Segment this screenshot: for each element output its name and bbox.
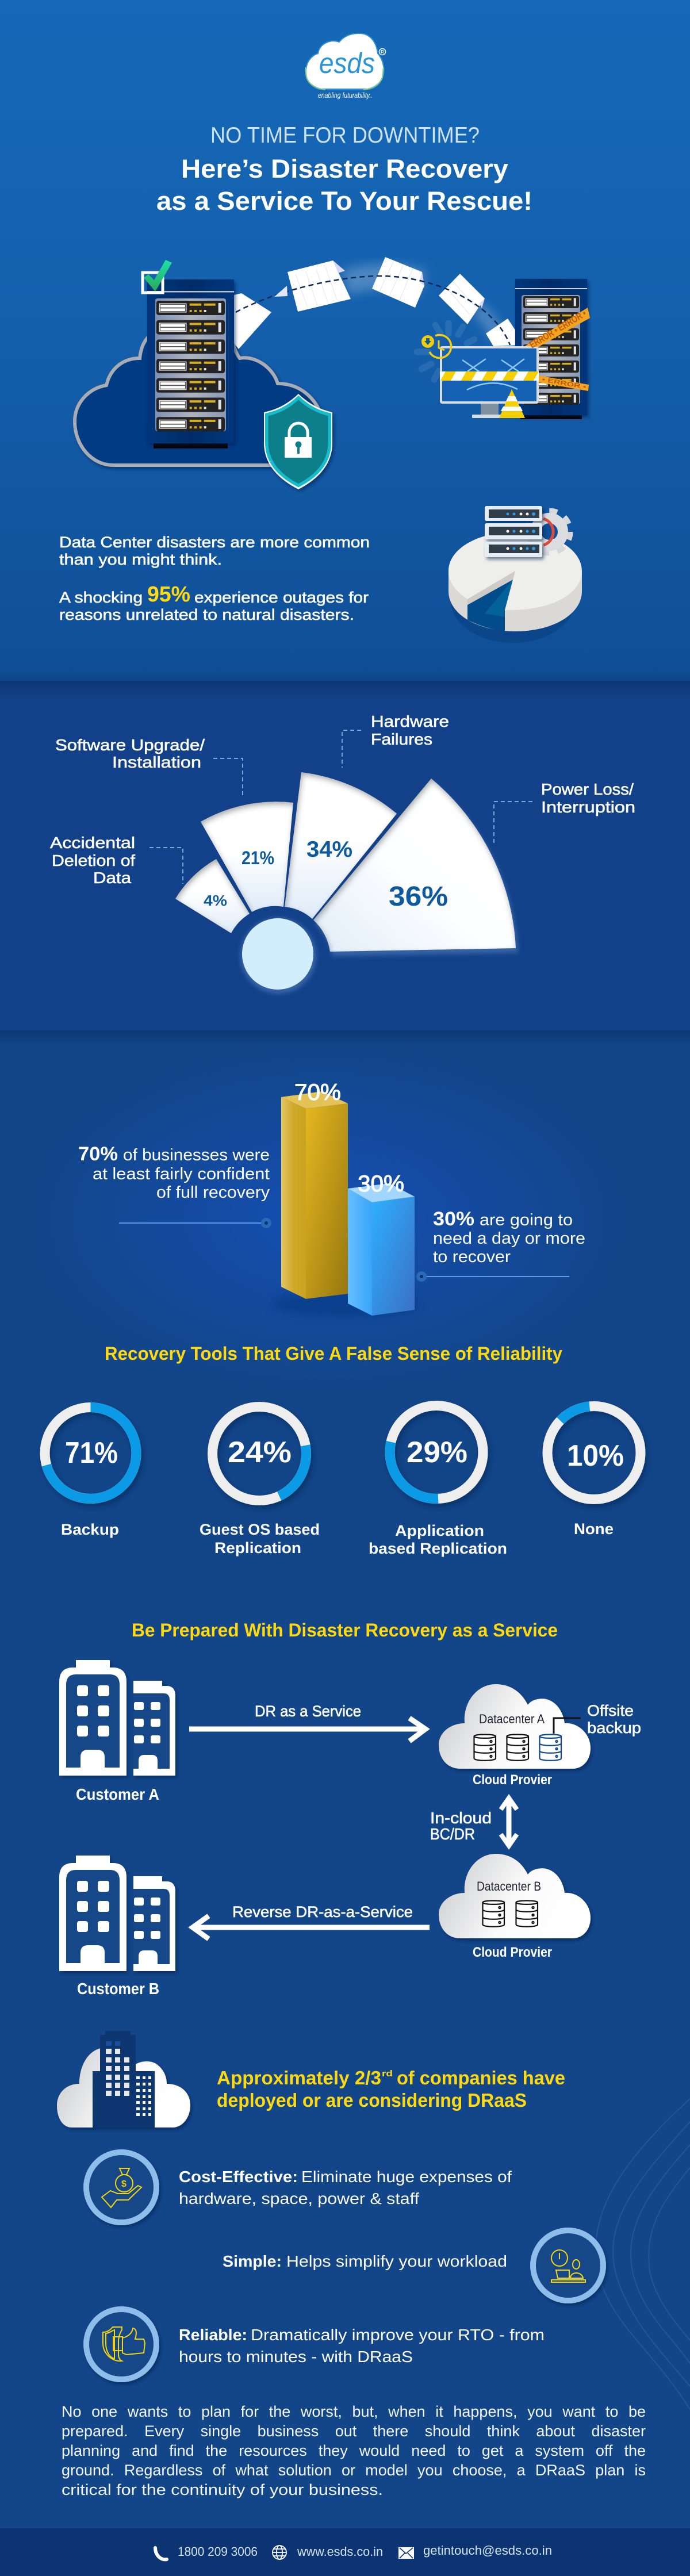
- fan chart: [175, 772, 518, 994]
- slice: 4%: 4%: [204, 892, 227, 909]
- closing paragraph: prepared. Every single business out there should think about disaster: [62, 2422, 646, 2440]
- icon: money bag in hand: [102, 2168, 141, 2207]
- callout: 70 percent: at least fairly confident: [93, 1165, 270, 1183]
- slice: 36%: 36%: [389, 881, 448, 912]
- blue bar 30%: [348, 1171, 415, 1316]
- icon: shield with thumbs up: [103, 2327, 145, 2361]
- logo: enabling futurability..: [318, 91, 373, 99]
- benefit: simple: Simple:: [223, 2252, 282, 2270]
- closing paragraph: ground. Regardless of what solution or model you choose, a DRaaS plan is: [62, 2462, 646, 2479]
- heading: two thirds deployed: Approximately 2/3: [217, 2067, 381, 2088]
- slice: 4%: [175, 859, 250, 933]
- arrow: reverse dr as a service: Reverse DR-as-a-Service: [232, 1903, 413, 1920]
- heading: two thirds deployed: of companies have: [397, 2067, 565, 2088]
- gold bar 70%: 70%: [294, 1080, 341, 1105]
- donut: guest os 24%: Guest OS based: [200, 1521, 320, 1538]
- intro text: Data Center disasters are more common: [59, 534, 370, 551]
- dashed transfer arrow: [236, 276, 510, 345]
- closing paragraph: [62, 2403, 646, 2479]
- benefit: reliable: Reliable:: [179, 2326, 247, 2344]
- callout: 30 percent: 30%: [433, 1208, 474, 1230]
- checkbox with tick: [143, 260, 172, 293]
- gear: [530, 512, 569, 551]
- label: accidental deletion: Deletion of: [52, 852, 135, 869]
- left server rack: [147, 279, 234, 448]
- label: accidental deletion: Accidental: [50, 834, 135, 852]
- label: hardware failures: Failures: [371, 730, 432, 748]
- cloud: datacenter a: [439, 1684, 641, 1788]
- heading: two thirds deployed: [217, 2067, 565, 2111]
- donut: guest os 24%: Replication: [214, 1539, 301, 1557]
- callout: 30 percent: [416, 1208, 585, 1282]
- right server rack: [515, 279, 587, 419]
- icon: globe: [273, 2546, 286, 2559]
- heading: two thirds deployed: rd: [382, 2069, 393, 2079]
- error tape: • ERROR •: [541, 376, 587, 391]
- in-cloud bc/dr double arrow: In-cloud: [430, 1809, 492, 1827]
- benefit: cost-effective: [86, 2152, 512, 2222]
- benefit: simple: [223, 2230, 603, 2301]
- label: software upgrade: Installation: [112, 753, 201, 771]
- donut: application 29%: based Replication: [369, 1540, 507, 1557]
- broken monitor: [440, 347, 539, 418]
- heading: two thirds deployed: deployed or are considering DRaaS: [217, 2090, 527, 2111]
- data transfer glow: [345, 277, 500, 339]
- in-cloud bc/dr double arrow: BC/DR: [430, 1825, 475, 1843]
- blue bar 30%: 30%: [358, 1171, 404, 1197]
- slice: 34%: 34%: [306, 837, 352, 862]
- donut: application 29%: 29%: [407, 1436, 467, 1469]
- logo: R: [381, 49, 384, 55]
- error tape: [525, 308, 590, 391]
- benefit: reliable: [86, 2309, 545, 2379]
- 3d bar chart: [270, 1080, 420, 1317]
- label: hardware failures: [342, 712, 449, 768]
- in-cloud bc/dr double arrow: [430, 1798, 517, 1846]
- cloud: datacenter b: [439, 1854, 591, 1960]
- loading spinner: [417, 323, 474, 379]
- label: software upgrade: Software Upgrade/: [55, 736, 205, 754]
- flying document 4: [439, 274, 485, 324]
- donut: guest os 24%: [200, 1406, 320, 1557]
- footer: [0, 2528, 690, 2576]
- benefit: reliable: hours to minutes - with DRaaS: [179, 2348, 413, 2366]
- glow under largest slice: [316, 783, 518, 956]
- intro text: than you might think.: [59, 551, 222, 568]
- icon: money bag in hand: $: [121, 2179, 126, 2189]
- flying document 3: [372, 257, 424, 308]
- cloud: datacenter b: Cloud Provier: [473, 1945, 552, 1960]
- intro text: reasons unrelated to natural disasters.: [59, 606, 354, 623]
- label: accidental deletion: Data: [93, 869, 131, 887]
- arrow: dr as a service: [189, 1703, 425, 1741]
- callout: 30 percent: to recover: [433, 1248, 511, 1266]
- benefit: cost-effective: Eliminate huge expenses of: [301, 2168, 512, 2186]
- flying document 1: [234, 293, 271, 349]
- cloud: datacenter a: Offsite: [587, 1702, 634, 1719]
- icon: phone: [155, 2548, 167, 2559]
- donut: application 29%: Application: [395, 1522, 484, 1539]
- donut: backup 71%: 71%: [65, 1436, 118, 1470]
- callout: 70 percent: of businesses were: [123, 1146, 270, 1164]
- closing paragraph: No one wants to plan for the worst, but, when it happens, you want to be: [62, 2403, 646, 2420]
- clock badge: [421, 335, 451, 358]
- slice: 21%: 21%: [241, 848, 274, 868]
- footer: www.esds.co.in: [297, 2544, 383, 2559]
- callout: 70 percent: [78, 1143, 271, 1228]
- icon: envelope: [398, 2547, 414, 2559]
- flying document 2: [288, 260, 351, 312]
- title: as a Service To Your Rescue!: [156, 186, 532, 216]
- donut: none 10%: [547, 1406, 641, 1538]
- label: power loss: [494, 780, 635, 843]
- footer: 1800 209 3006: [178, 2544, 258, 2559]
- customer a building: [59, 1660, 175, 1803]
- slice: 36%: [313, 779, 516, 952]
- slice: 34%: [285, 772, 397, 919]
- gold bar 70%: [281, 1080, 348, 1299]
- heading: be prepared: Be Prepared With Disaster Recovery as a Service: [132, 1620, 558, 1640]
- donut: guest os 24%: 24%: [228, 1436, 292, 1469]
- donut: backup 71%: [45, 1408, 136, 1538]
- cloud: datacenter a: backup: [587, 1719, 641, 1736]
- benefit: cost-effective: hardware, space, power & staff: [179, 2190, 419, 2207]
- title: Here’s Disaster Recovery: [181, 154, 508, 183]
- benefit: reliable: Dramatically improve your RTO - from: [251, 2326, 545, 2344]
- label: power loss: Interruption: [541, 798, 635, 816]
- closing paragraph: planning and find the resources they would need to get a system off the: [62, 2442, 646, 2459]
- server stack: [485, 506, 542, 557]
- customer b building: [59, 1856, 175, 1998]
- footer: getintouch@esds.co.in: [423, 2543, 552, 2558]
- callout: 30 percent: need a day or more: [433, 1229, 585, 1248]
- slice: 21%: [201, 802, 293, 912]
- label: hardware failures: Hardware: [371, 712, 449, 730]
- arrow: reverse dr as a service: [193, 1903, 430, 1939]
- pie chart with server: [448, 506, 582, 643]
- donut: application 29%: [369, 1405, 507, 1557]
- callout: 30 percent: are going to: [480, 1211, 573, 1229]
- customer b building: Customer B: [77, 1980, 159, 1998]
- customer a building: Customer A: [76, 1785, 159, 1803]
- intro text: [59, 534, 370, 623]
- arrow: dr as a service: DR as a Service: [255, 1703, 361, 1720]
- title: [156, 123, 532, 216]
- decorative wave lines: [596, 2099, 690, 2409]
- intro text: experience outages for: [194, 589, 369, 606]
- cloud: datacenter a: Cloud Provier: [473, 1772, 552, 1788]
- heading: recovery tools: Recovery Tools That Give A False Sense of Reliability: [105, 1343, 562, 1364]
- benefit: simple: Helps simplify your workload: [286, 2252, 507, 2270]
- cloud: datacenter b: Datacenter B: [477, 1879, 541, 1893]
- fan chart labels: [50, 712, 635, 887]
- error tape: ERROR • ERROR •: [527, 308, 588, 350]
- label: accidental deletion: [50, 834, 183, 887]
- hub circle: [240, 918, 316, 994]
- logo: [305, 33, 385, 99]
- donut: none 10%: None: [574, 1520, 614, 1538]
- donut: none 10%: 10%: [567, 1439, 624, 1473]
- intro text: A shocking: [59, 589, 143, 606]
- icon: city in cloud: [57, 2031, 190, 2128]
- benefit: cost-effective: Cost-Effective:: [179, 2168, 298, 2186]
- hero illustration: [75, 257, 590, 489]
- traffic cone: [499, 389, 525, 418]
- icon: clock and person at desk: [551, 2250, 585, 2282]
- callout: 70 percent: 70%: [78, 1143, 118, 1165]
- label: power loss: Power Loss/: [541, 780, 634, 798]
- label: software upgrade: [55, 736, 243, 796]
- callout: 70 percent: of full recovery: [156, 1183, 270, 1202]
- cloud: datacenter a: Datacenter A: [479, 1712, 545, 1726]
- security shield: [264, 394, 332, 489]
- logo: esds: [319, 47, 375, 79]
- cloud outline: [75, 338, 322, 465]
- closing paragraph last line: critical for the continuity of your business.: [62, 2481, 383, 2498]
- donut: backup 71%: Backup: [61, 1521, 119, 1538]
- title: NO TIME FOR DOWNTIME?: [210, 123, 480, 148]
- flying document 5: [486, 319, 525, 346]
- intro text: 95%: [147, 582, 190, 607]
